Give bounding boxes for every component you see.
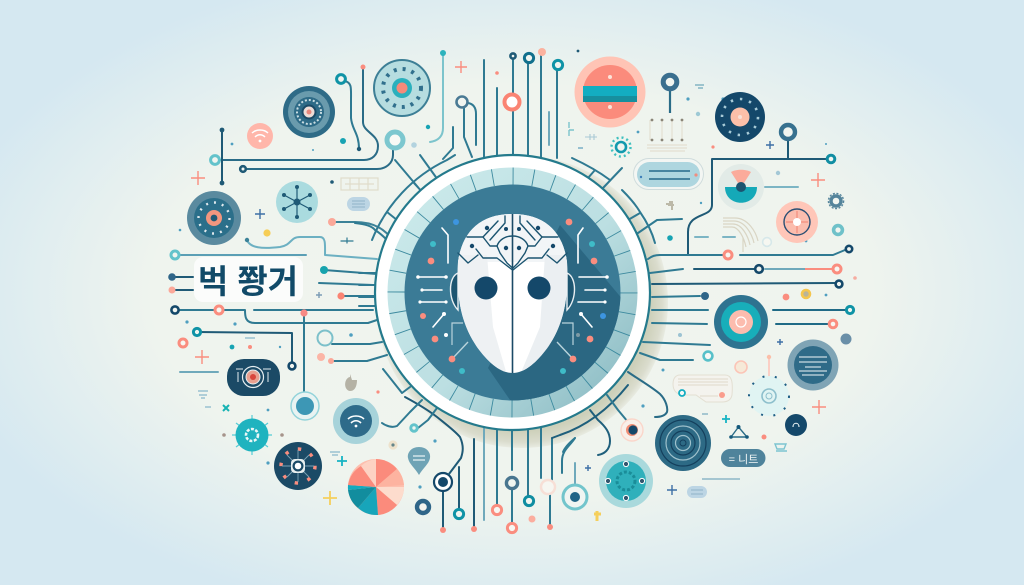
icon: lightbulb pin <box>408 447 430 475</box>
icon: pale target <box>621 419 643 441</box>
node: top teal dot <box>440 50 446 56</box>
node: pale ring <box>763 238 771 246</box>
ring drop shadow <box>376 156 668 448</box>
node: pink dot <box>300 309 308 317</box>
circuit traces: top <box>430 48 563 159</box>
eyes <box>474 276 550 300</box>
node: teal ring <box>337 75 345 83</box>
node: dark ring <box>836 281 842 287</box>
disc circuits left <box>416 219 468 374</box>
node: ends <box>220 128 361 242</box>
central badge <box>375 155 650 430</box>
node: faint ring <box>541 480 555 494</box>
node: teal target <box>291 392 319 420</box>
icon: teal chip disc <box>599 454 653 508</box>
icon: faint arcs <box>723 218 758 252</box>
disc circuits right <box>557 219 609 374</box>
node: salmon ring centre <box>507 523 517 533</box>
band <box>388 168 638 418</box>
icon: faint chat card <box>673 375 732 402</box>
node: right teal ring <box>553 60 563 70</box>
icon: chat pill left <box>347 197 370 211</box>
chart: pie <box>348 459 404 515</box>
korean label: 벅 쫭거 <box>198 263 298 300</box>
node: bottom target ring <box>434 473 452 491</box>
icon: teal sun <box>222 415 284 455</box>
face mask <box>457 214 568 373</box>
node: dark ring <box>240 166 246 172</box>
disc <box>404 184 620 400</box>
icon: pale salmon dot <box>735 361 747 373</box>
node: blue ring centre <box>506 477 518 489</box>
node: light teal ring <box>387 132 403 148</box>
target: teal <box>563 485 587 509</box>
node: blue dot <box>168 273 176 281</box>
node: dark ring middle <box>755 265 763 273</box>
node: salmon ring <box>215 306 223 314</box>
decor: plus signs <box>191 61 826 521</box>
circuit traces: bottom <box>434 428 587 533</box>
node: top salmon dot <box>538 48 546 56</box>
node: teal ring top <box>827 155 835 163</box>
node: salmon ring left <box>492 505 502 515</box>
label pill: = 니트 <box>729 453 758 466</box>
node: salmon ring <box>833 265 841 273</box>
icon: triangle network <box>729 425 749 439</box>
node: teal ring <box>454 509 464 519</box>
node: pink dot <box>168 286 176 294</box>
label pill <box>721 449 766 467</box>
band ticks <box>396 176 629 409</box>
icon: faint glyphs <box>569 85 704 210</box>
node: teal ring label <box>171 251 179 259</box>
icon: hatched dot <box>840 334 852 344</box>
node: top teal ring <box>524 53 534 63</box>
icon: salmon band disc <box>574 56 646 128</box>
node: dark ring <box>171 306 179 314</box>
icon: concentric dark disc <box>655 415 711 471</box>
icon: faint chip <box>647 119 687 151</box>
node: teal donut <box>704 352 712 360</box>
icon: dial left <box>187 191 241 245</box>
icon: wifi disc <box>333 398 379 444</box>
node: teal ring left <box>211 156 219 164</box>
icon: stacked layers <box>775 444 787 451</box>
icon: capsule <box>634 158 704 190</box>
node: arc ring <box>411 425 417 431</box>
node: salmon ring <box>724 251 732 259</box>
node: teal ring <box>846 306 854 314</box>
node: light teal ring <box>318 330 332 346</box>
icon: wifi salmon <box>247 123 273 149</box>
icon: navy dial <box>715 92 765 142</box>
icon: pin ring top right <box>663 75 677 113</box>
left ring spokes <box>359 273 385 306</box>
icon: list disc <box>788 340 838 390</box>
decor: stack glyphs <box>198 338 340 455</box>
node: grey-blue ring <box>456 96 468 108</box>
circuit traces: upper left <box>168 64 403 300</box>
node: salmon ring <box>504 94 520 110</box>
circuit traces: lower left <box>171 306 387 420</box>
node: pink dot <box>360 64 366 70</box>
icon: round teal chip <box>374 60 430 116</box>
face shadow <box>488 226 620 400</box>
icon: yellow ring <box>802 290 810 298</box>
node: teal ring right <box>524 496 534 506</box>
icon: teal gear small <box>612 138 630 156</box>
node: salmon dots <box>317 353 334 364</box>
decor: line and dash <box>702 414 740 479</box>
icon: teal donut right <box>834 226 842 234</box>
node: salmon dot <box>337 292 345 300</box>
icon: navy dot <box>785 414 807 436</box>
label box <box>194 257 303 302</box>
node: teal ring <box>193 328 201 336</box>
node: pink dots <box>440 516 553 533</box>
icon: half dial <box>718 164 764 210</box>
node: dark ring <box>289 363 295 369</box>
node: blue dot <box>701 292 709 300</box>
node: teal dot <box>320 266 328 274</box>
decor: small dots <box>179 50 857 489</box>
icon: chat pill bottom <box>687 486 707 498</box>
outer ring <box>375 155 650 430</box>
brain circuit <box>458 216 567 270</box>
icon: gear grey <box>828 193 844 209</box>
outer segmented arcs <box>355 155 682 474</box>
icon: large teal target right <box>714 295 768 349</box>
node: salmon ring <box>829 320 837 328</box>
node: dark ring <box>846 246 852 252</box>
icon: gear disc upper left <box>283 86 335 138</box>
icon: faint bracket glyph <box>341 178 378 190</box>
icon: dotted radar <box>749 355 789 416</box>
node: salmon ring <box>179 339 187 347</box>
node: top dark ring <box>510 53 516 59</box>
circuit traces: right <box>640 125 854 360</box>
icon: plug grey <box>345 374 357 391</box>
icon: salmon dial <box>776 201 818 243</box>
face facets <box>458 214 568 372</box>
icon: navy donut <box>417 501 429 513</box>
icon: pill badge <box>227 359 280 396</box>
icon: molecule <box>276 181 318 223</box>
icon: hub disc <box>274 442 322 490</box>
node: dark ring pin <box>781 125 795 139</box>
ears <box>450 273 574 310</box>
node: salmon dot <box>328 218 336 226</box>
icon: tan dot <box>388 440 398 450</box>
